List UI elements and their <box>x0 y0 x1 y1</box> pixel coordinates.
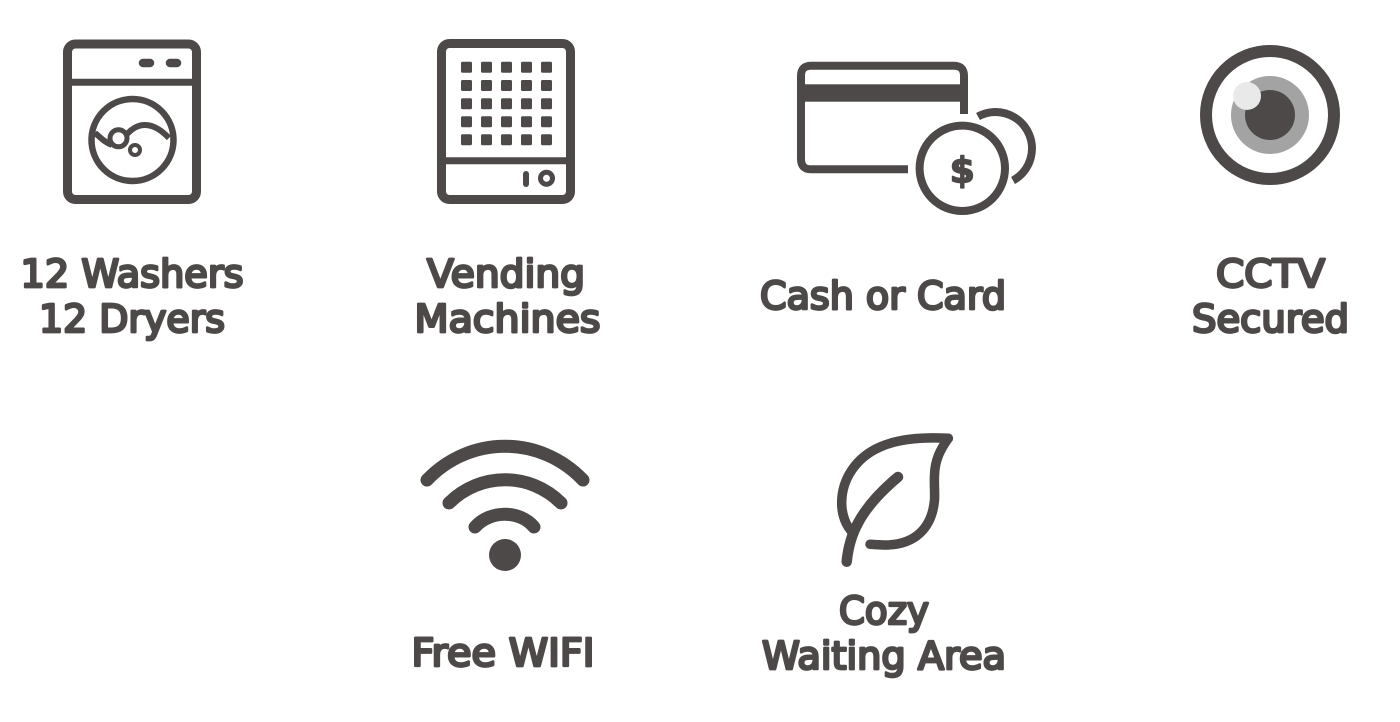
icon: wifi <box>427 446 583 571</box>
label: 12 washers 12 dryers: 12 Washers <box>20 252 244 296</box>
label: free wifi: Free WIFI <box>412 631 594 675</box>
label: 12 washers 12 dryers <box>20 252 244 341</box>
label: 12 washers 12 dryers: 12 Dryers <box>39 297 225 341</box>
icon: card and coins: $ <box>950 150 975 192</box>
label: cash or card: Cash or Card <box>760 274 1006 318</box>
label: cozy waiting area <box>762 589 1006 678</box>
icon: vending machine <box>441 44 571 200</box>
label: cctv secured: CCTV <box>1216 252 1325 296</box>
icon: cctv eye <box>1206 51 1334 179</box>
icon: leaf <box>842 438 948 562</box>
label: vending machines: Vending <box>427 252 585 296</box>
label: cctv secured <box>1192 252 1349 341</box>
icon: card and coins <box>801 66 1032 211</box>
label: cozy waiting area: Cozy <box>839 589 929 633</box>
label: vending machines: Machines <box>414 297 600 341</box>
label: cozy waiting area: Waiting Area <box>762 634 1006 678</box>
label: cctv secured: Secured <box>1192 297 1349 341</box>
icon: washing machine <box>67 44 197 200</box>
label: vending machines <box>414 252 600 341</box>
